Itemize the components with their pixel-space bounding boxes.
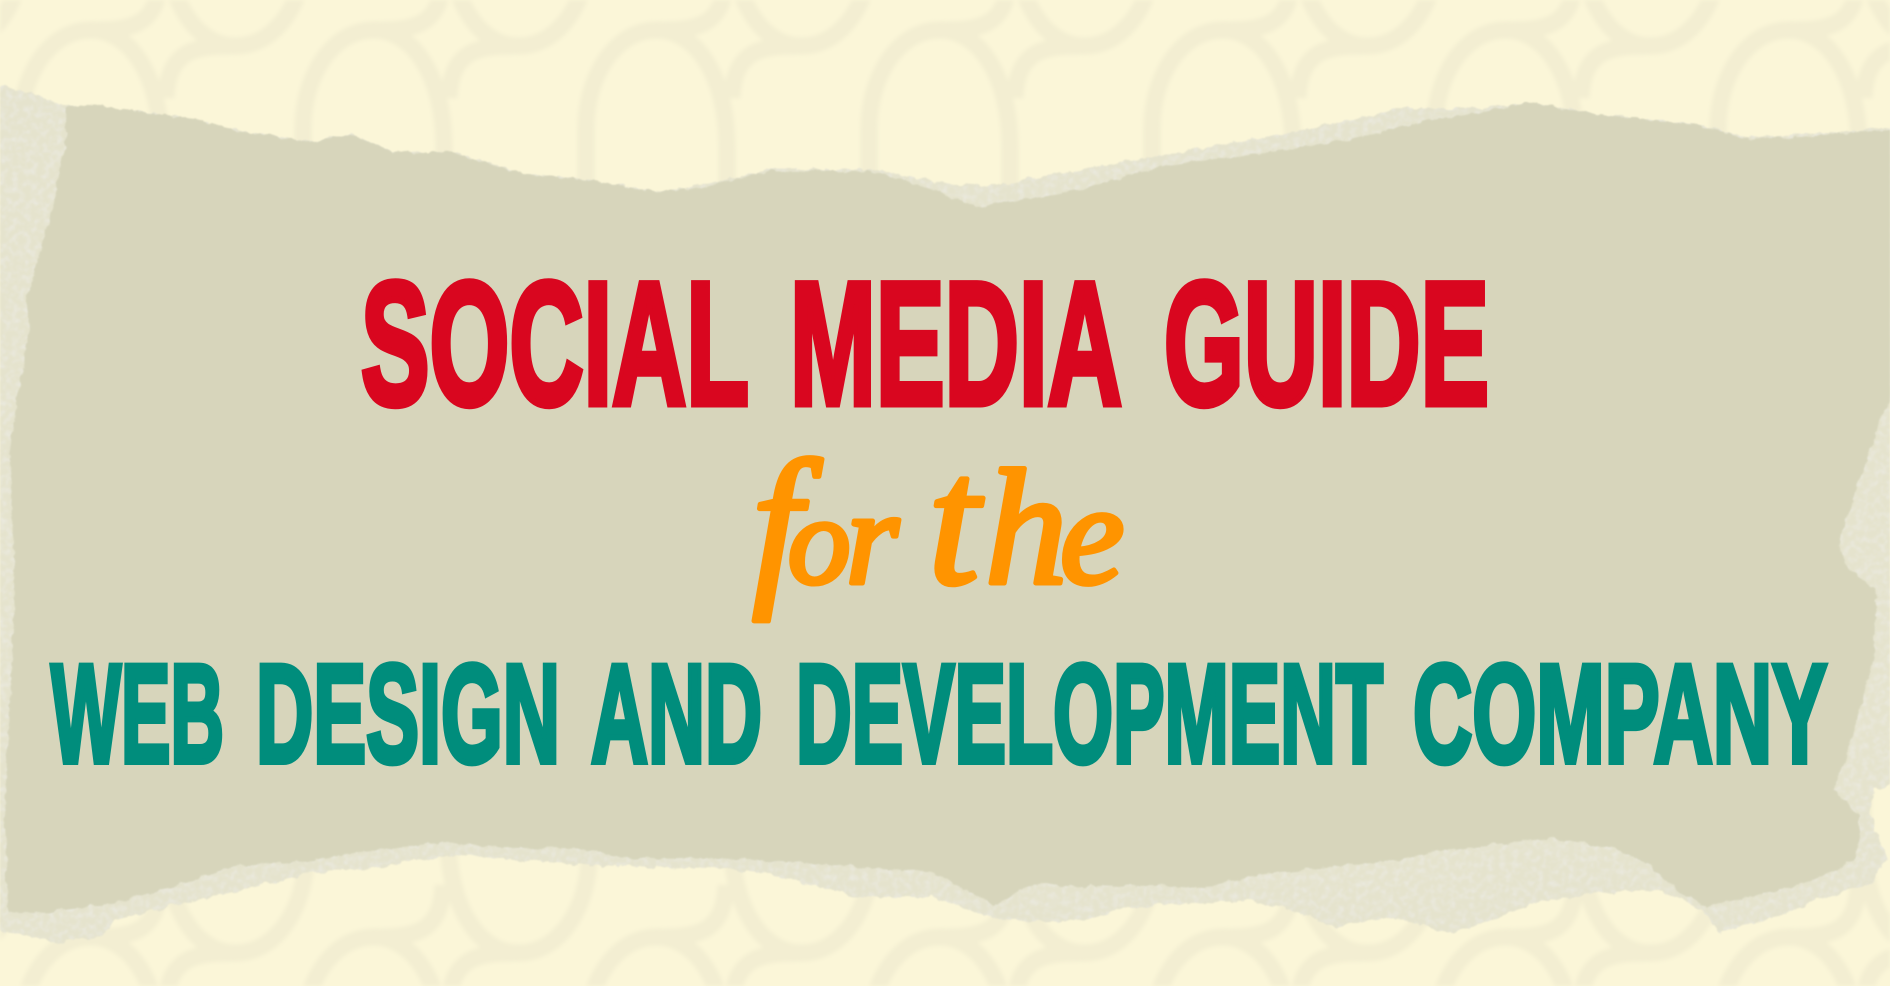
script line: for the: t xyxy=(928,419,984,624)
title line: Social Media Guide xyxy=(361,247,1489,442)
script line: for the: f xyxy=(752,424,822,622)
script line: for the: e xyxy=(1060,455,1124,615)
subtitle line: Web Design and Development Company: DESIGN xyxy=(256,635,560,792)
subtitle line: Web Design and Development Company: AND xyxy=(591,635,762,792)
subtitle line: Web Design and Development Company xyxy=(51,635,1827,792)
title line: Social Media Guide: GUIDE xyxy=(1164,247,1489,442)
subtitle line: Web Design and Development Company: WEB xyxy=(51,635,224,792)
subtitle line: Web Design and Development Company: DEVELOPMENT xyxy=(796,635,1383,792)
script line: for the: r xyxy=(846,464,899,613)
script line: for the: o xyxy=(788,473,850,611)
title line: Social Media Guide: MEDIA xyxy=(790,247,1122,442)
script line: for the: h xyxy=(985,436,1068,619)
title line: Social Media Guide: SOCIAL xyxy=(361,247,749,442)
